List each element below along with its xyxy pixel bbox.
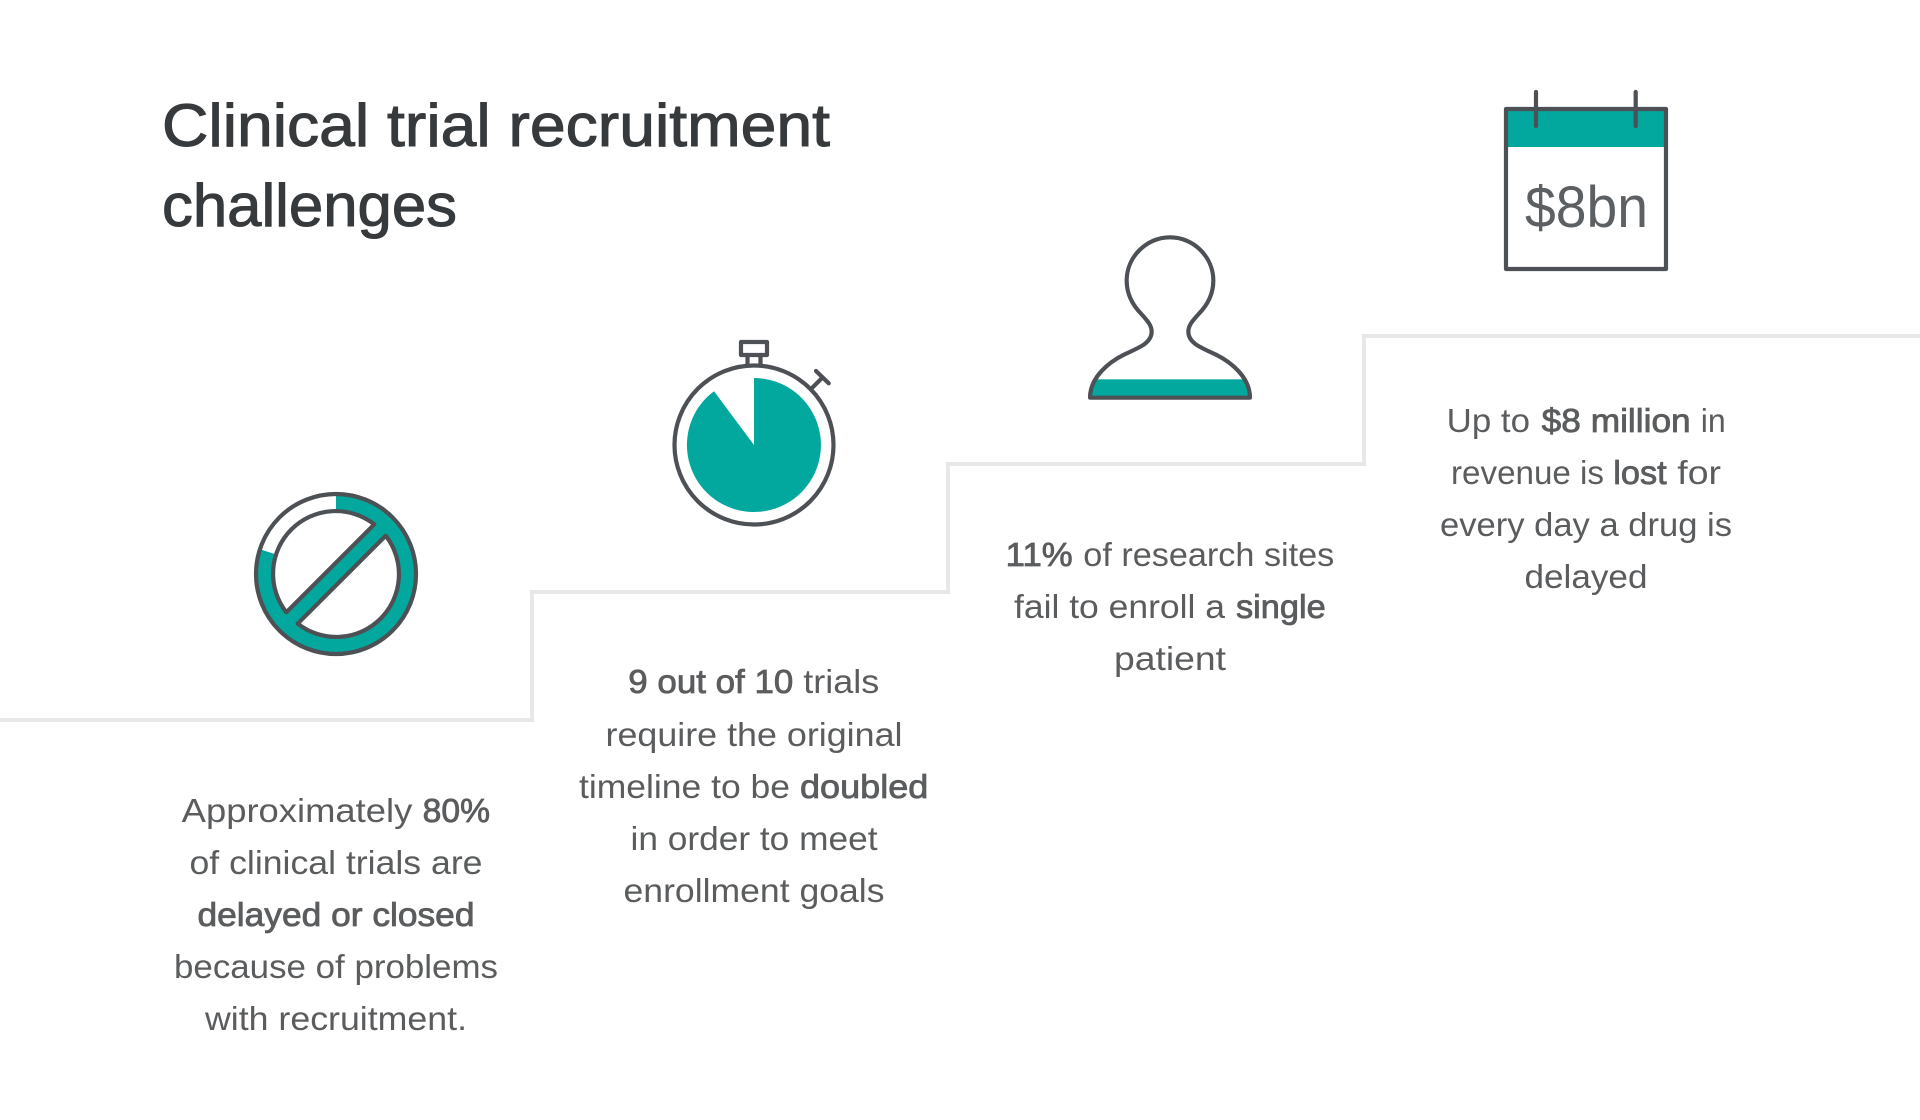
text: 9 out of 10 trials: trials (803, 663, 879, 700)
text: 80% delayed or closed: of clinical trials are (190, 844, 482, 881)
text: 80% delayed or closed (174, 792, 498, 1037)
text: 9 out of 10 trials (579, 663, 928, 909)
icon: calendar (1506, 92, 1666, 269)
title: challenges (162, 172, 457, 239)
staircase line (0, 336, 1920, 720)
text: 9 out of 10 trials: 9 out of 10 (628, 663, 793, 700)
text: 80% delayed or closed: delayed or closed (198, 896, 474, 933)
icon: person (1087, 237, 1253, 399)
text: $8 million lost: $8 million (1542, 402, 1691, 439)
text: 9 out of 10 trials: require the original (606, 716, 902, 753)
text: $8 million lost: every day a drug is (1440, 506, 1732, 543)
text: 9 out of 10 trials: in order to meet (630, 820, 878, 857)
text: 80% delayed or closed: with recruitment. (204, 1000, 467, 1037)
text: 11% of research sites: fail to enroll a (1014, 588, 1226, 625)
text: $8 million lost (1440, 402, 1732, 595)
text: 11% of research sites: patient (1114, 640, 1226, 677)
title: Clinical trial recruitment (162, 92, 830, 159)
text: 9 out of 10 trials: enrollment goals (624, 872, 884, 909)
text: 9 out of 10 trials: timeline to be (579, 768, 790, 805)
text: $8 million lost: delayed (1524, 558, 1648, 595)
title (162, 92, 830, 239)
text: 80% delayed or closed: because of problems (174, 948, 498, 985)
text: $8 million lost: lost (1613, 454, 1667, 491)
icon: prohibition sign with 80% ring (256, 494, 416, 654)
calendar label: $8bn (1525, 175, 1648, 240)
text: 11% of research sites (1006, 536, 1334, 677)
text: $8 million lost: revenue is (1451, 454, 1604, 491)
text: 11% of research sites: of research sites (1083, 536, 1334, 573)
text: $8 million lost: Up to (1447, 402, 1530, 439)
text: $8 million lost: in (1701, 402, 1726, 439)
icon: stopwatch (674, 342, 834, 524)
text: $8 million lost: for (1677, 454, 1721, 491)
text: 9 out of 10 trials: doubled (800, 768, 928, 805)
text: 11% of research sites: single (1236, 588, 1326, 625)
text: 11% of research sites: 11% (1006, 536, 1073, 573)
text: 80% delayed or closed: 80% (423, 792, 490, 829)
text: 80% delayed or closed: Approximately (182, 792, 413, 829)
